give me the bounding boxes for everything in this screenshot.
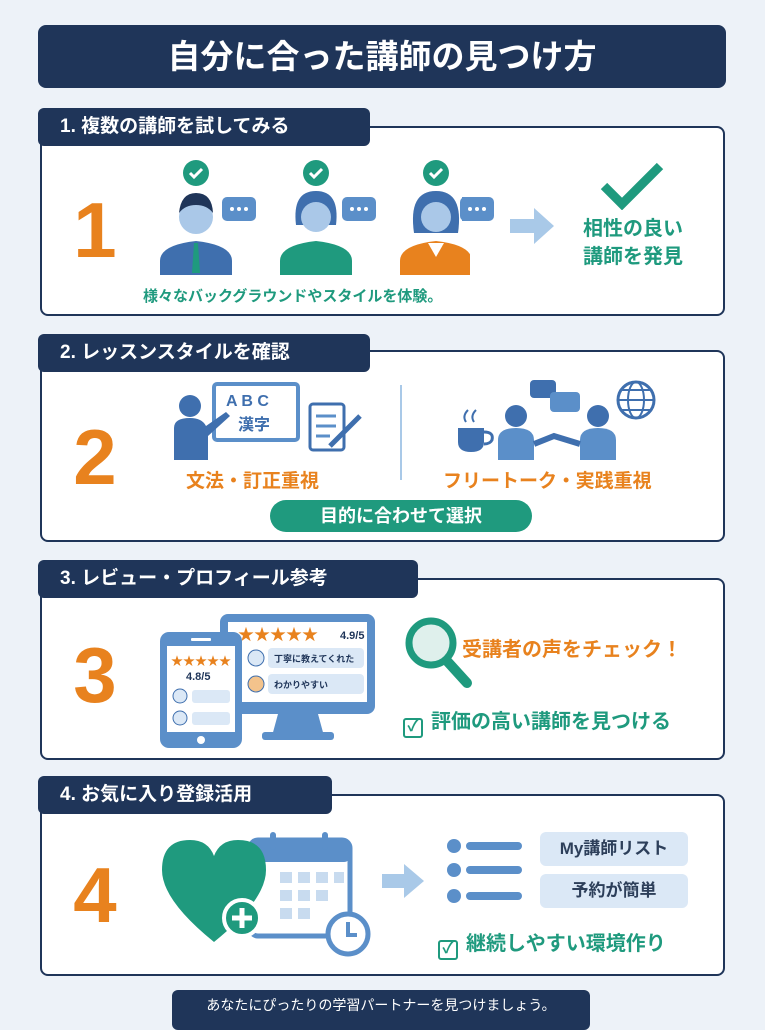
text: find highly rated: ✓: [407, 718, 419, 735]
panel 3: [40, 578, 725, 760]
arrow 1: [510, 208, 554, 244]
label: my teacher list: [540, 832, 688, 866]
icon: devices with reviews: 4.9/5: [340, 630, 364, 642]
icon: teacher at board: A B C: [226, 393, 269, 410]
label: grammar: 文法・訂正重視: [186, 471, 319, 492]
icon: list: [447, 839, 522, 903]
tab 4: 4. お気に入り登録活用: [60, 784, 252, 805]
icon: devices with reviews: わかりやすい: [274, 678, 328, 691]
result: checkmark and text: [583, 162, 683, 268]
divider: [400, 385, 402, 480]
number 4: 4: [73, 851, 117, 939]
panel 2: [40, 350, 725, 542]
icon: conversation: [458, 380, 656, 460]
label: easy booking: [540, 874, 688, 908]
tab 3: 3. レビュー・プロフィール参考: [60, 568, 328, 589]
result: checkmark and text: 相性の良い: [583, 218, 683, 240]
tab 1: [38, 108, 370, 146]
text: find highly rated: 評価の高い講師を見つける: [431, 711, 671, 733]
label: easy booking: 予約が簡単: [572, 881, 656, 900]
icon: devices with reviews: ★★★★★: [238, 627, 318, 644]
icon: devices with reviews: ★★★★★: [171, 654, 231, 668]
icons: three teachers: [160, 160, 470, 275]
icon: devices with reviews: 丁寧に教えてくれた: [274, 652, 354, 665]
label: my teacher list: My講師リスト: [560, 839, 668, 858]
tab 1: 1. 複数の講師を試してみる: [60, 116, 290, 137]
tab 4: [38, 776, 332, 814]
icon: devices with reviews: [160, 614, 375, 748]
panel 4: [40, 794, 725, 976]
icon: teacher at board: [174, 382, 362, 460]
tab 2: [38, 334, 370, 372]
tab 2: 2. レッスンスタイルを確認: [60, 342, 290, 363]
text: sustainable environment: 継続しやすい環境作り: [466, 933, 666, 955]
number 3: 3: [73, 631, 117, 719]
panel 1: [40, 126, 725, 316]
badge: choose by purpose: [270, 500, 532, 532]
arrow 4: [382, 864, 424, 898]
footer: あなたにぴったりの学習パートナーを見つけましょう。: [206, 997, 556, 1013]
label: free talk: フリートーク・実践重視: [443, 471, 652, 492]
title: 自分に合った講師の見つけ方: [168, 38, 596, 75]
icon: heart with calendar: [162, 832, 370, 956]
icon: magnifier: [406, 618, 472, 688]
footer: [172, 990, 590, 1030]
icon: speech bubble 3: [460, 197, 494, 221]
title: [38, 25, 726, 88]
number 1: 1: [73, 186, 117, 274]
icon: teacher at board: 漢字: [238, 411, 270, 435]
result: checkmark and text: 講師を発見: [583, 246, 683, 268]
number 2: 2: [73, 413, 117, 501]
text: check reviews: 受講者の声をチェック！: [462, 639, 682, 661]
icon: devices with reviews: 4.8/5: [186, 671, 210, 683]
caption 1: 様々なバックグラウンドやスタイルを体験。: [143, 288, 442, 305]
tab 3: [38, 560, 418, 598]
badge: choose by purpose: 目的に合わせて選択: [320, 506, 482, 526]
text: sustainable environment: ✓: [442, 940, 454, 957]
